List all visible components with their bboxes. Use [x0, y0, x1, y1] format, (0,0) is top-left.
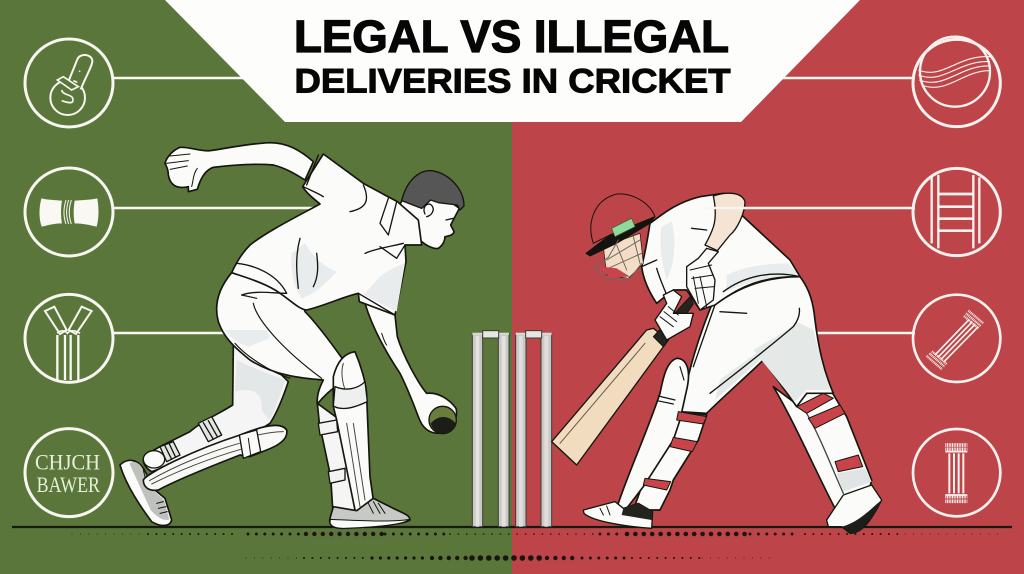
batsman: green helmet badge: [612, 218, 635, 237]
ground line: [12, 526, 1012, 528]
dotted ground texture: [72, 534, 1000, 558]
bowler: trailing knee straps: [160, 417, 222, 462]
bowler: ankle: [143, 451, 165, 468]
bowler: front leg behind pad: [317, 403, 358, 512]
batsman figure: [552, 193, 882, 533]
batsman: bat blade: [552, 328, 668, 465]
bowler figure: [120, 143, 464, 528]
bowler: ball in release hand: [429, 406, 456, 434]
batsman: front shoe: [583, 502, 653, 528]
batsman: bottom glove: [655, 290, 693, 340]
stump pair right of divide: [516, 331, 552, 527]
icon: ladder, red panel: [913, 168, 1000, 256]
bowler: trailing leg: [143, 343, 288, 472]
batsman: shirt torso: [642, 193, 800, 310]
icon: diagonal rope bundle, red panel: [913, 295, 1000, 382]
batsman: back shoe: [827, 485, 882, 533]
panel: illegal side red background: [512, 0, 1024, 574]
bowler: front shin pad: [318, 352, 373, 512]
batsman: helmet peak: [586, 217, 655, 256]
batsman: top glove: [687, 248, 718, 310]
badge text line 1: CHJCH: [35, 449, 100, 474]
bowler: hair and head: [400, 171, 464, 249]
panel: legal side green background: [0, 0, 512, 574]
icon: bat and ball, green panel: [25, 39, 113, 127]
batsman: back shin pad and leg: [773, 387, 872, 508]
batsman: front shin: [633, 412, 707, 510]
icon: text badge, green panel: [25, 429, 113, 517]
batsman: helmet grill: [594, 237, 642, 279]
bowler: shorts and thigh: [217, 273, 343, 404]
batsman: upper arm skin: [705, 193, 745, 251]
bowler: trailing foot shoe: [120, 460, 172, 525]
stumps: [472, 331, 552, 527]
title banner: [165, 0, 860, 122]
title line 1: LEGAL VS ILLEGAL: [294, 11, 729, 62]
batsman: helmet shell: [591, 194, 655, 243]
batsman: face: [603, 233, 643, 278]
batsman: bat handle: [653, 297, 693, 347]
title line 2: DELIVERIES IN CRICKET: [294, 62, 730, 100]
bowler: bowling arm and hand: [165, 143, 313, 192]
batsman: trousers: [680, 270, 833, 413]
batsman: chin guard: [597, 266, 630, 277]
bowler: shirt torso: [232, 154, 422, 315]
batsman: front shin pad: [617, 358, 707, 508]
icon: vertical rope bundle, red panel: [913, 429, 1000, 516]
bowler: trailing leg shading: [235, 360, 285, 420]
icon: stumps, green panel: [25, 294, 113, 382]
bowler: front shoe: [330, 498, 410, 528]
bowler: trailing shin pad: [143, 425, 287, 490]
icon: pitch strip, green panel: [25, 168, 113, 256]
bowler: front arm: [365, 303, 457, 433]
connector line over batsman arm: [706, 207, 915, 209]
stump pair left of divide: [472, 331, 509, 527]
badge text line 2: BAWER: [37, 472, 100, 497]
icon: seam ball, red panel: [913, 37, 1000, 127]
connector lines from icons to figures: [114, 78, 915, 333]
